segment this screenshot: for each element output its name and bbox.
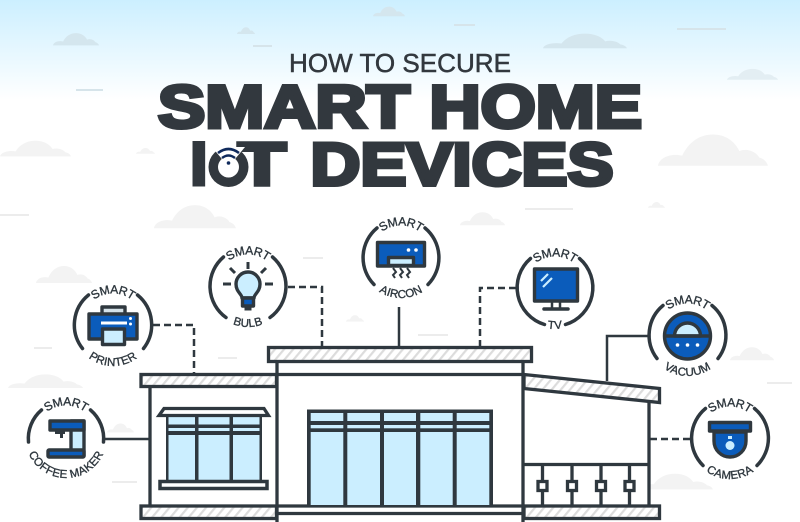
device: smart bulb [208,246,288,328]
title line: smart home: SMART HOME [158,73,642,140]
central block [268,348,532,522]
main window [307,410,493,508]
device: smart bulb: SMART [226,246,272,260]
title line: iot devices: DEVICES [310,131,614,198]
icon: television [534,269,578,309]
house [141,348,660,522]
device: smart camera: CAMERA [708,466,754,480]
icon: dome camera [710,422,750,457]
device: smart aircon: SMART [379,217,424,231]
device: smart aircon: AIRCON [378,285,422,298]
device: smart camera: SMART [708,398,754,412]
device: smart bulb: BULB [234,316,262,328]
device: smart printer [72,285,154,366]
device: smart printer: SMART [91,285,136,299]
connector lines [105,287,691,439]
sky background [0,0,800,100]
icon: air conditioner [378,242,424,278]
left window [159,408,268,488]
device: smart vacuum [647,295,728,376]
device: smart coffee maker: COFFEE MAKER [30,451,104,478]
icon: robot vacuum [664,313,710,359]
icon: light bulb [223,262,273,309]
device: smart tv: SMART [533,248,578,262]
device: smart tv: TV [548,320,562,330]
device: smart vacuum: VACUUM [666,361,710,376]
device: smart coffee maker: SMART [44,397,90,411]
title line: how to secure: HOW TO SECURE [289,48,511,78]
icon: printer [89,307,137,344]
device: smart aircon [361,217,441,298]
device: smart printer: PRINTER [89,352,138,366]
left wing [141,374,277,518]
title line: iot devices [190,130,614,198]
title line: iot devices: I [190,130,207,198]
device: smart tv [515,248,595,330]
title line: iot devices: T [238,131,286,198]
device: smart camera [690,398,770,480]
device: smart vacuum: SMART [666,295,711,309]
title [158,48,642,198]
device: smart coffee maker [26,397,106,478]
icon: coffee maker [48,421,84,457]
right wing [524,374,660,518]
